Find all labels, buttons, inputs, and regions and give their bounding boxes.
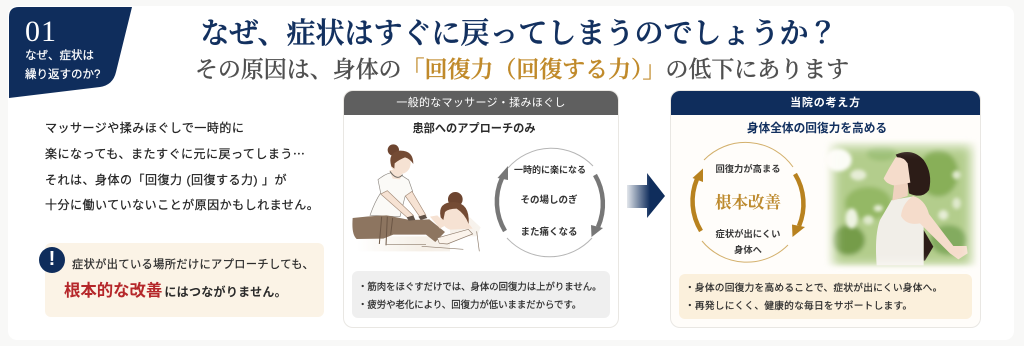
callout — [45, 243, 324, 317]
note box: ・再発しにくく、健康的な毎日をサポートします。 — [685, 301, 912, 312]
icon: exclamation — [39, 247, 65, 273]
cycle text: 一時的に楽になる — [514, 165, 586, 175]
intro text — [45, 121, 319, 212]
intro text: 十分に働いていないことが原因かもしれません。 — [45, 198, 319, 212]
title: なぜ、症状はすぐに戻ってしまうのでしょうか？ — [200, 11, 838, 52]
note box: ・疲労や老化により、回復力が低いままだからです。 — [358, 299, 581, 310]
cycle center text: その場しのぎ — [520, 195, 578, 206]
subtitle: その原因は、身体の「回復力（回復する力）」の低下にあります — [195, 57, 849, 82]
cycle bottom text — [716, 228, 780, 255]
hair lower — [924, 230, 933, 261]
badge text — [25, 49, 100, 81]
section badge — [9, 7, 132, 98]
client body — [352, 215, 445, 242]
note box: ・筋肉をほぐすだけでは、身体の回復力は上がりません。 — [358, 281, 601, 292]
badge text: 繰り返すのか? — [25, 69, 100, 81]
cycle center text: 根本改善 — [715, 193, 781, 212]
note box — [352, 271, 610, 318]
panel header — [671, 91, 980, 115]
note box — [679, 274, 972, 319]
panel: general massage — [344, 91, 618, 327]
cycle bottom text: また痛くなる — [520, 227, 578, 238]
callout line 2: 根本的な改善にはつながりません。 — [64, 282, 287, 300]
cycle text: 回復力が高まる — [715, 164, 781, 174]
panel header — [344, 91, 618, 115]
badge number: 01 — [25, 15, 57, 48]
note box: ・身体の回復力を高めることで、症状が出にくい身体へ。 — [685, 283, 942, 294]
panel header: 一般的なマッサージ・揉みほぐし — [396, 97, 566, 109]
therapist — [370, 172, 413, 217]
intro text: 楽になっても、またすぐに元に戻ってしまう… — [45, 145, 305, 162]
intro text: マッサージや揉みほぐしで一時的に — [45, 121, 244, 135]
panel subheading: 身体全体の回復力を高める — [747, 122, 887, 135]
intro text: それは、身体の「回復力 (回復する力) 」が — [45, 173, 287, 187]
photo: woman breathing outdoors — [827, 140, 978, 268]
cycle bottom text: 症状が出にくい — [716, 229, 780, 239]
callout line 1: 症状が出ている場所だけにアプローチしても、 — [72, 259, 314, 271]
badge text: なぜ、症状は — [25, 50, 94, 62]
panel header: 当院の考え方 — [790, 97, 861, 109]
panel: our approach — [671, 91, 980, 327]
panel subheading: 患部へのアプローチのみ — [412, 123, 536, 135]
cycle bottom text: 身体へ — [734, 245, 762, 255]
icon: exclamation: ! — [49, 248, 55, 270]
